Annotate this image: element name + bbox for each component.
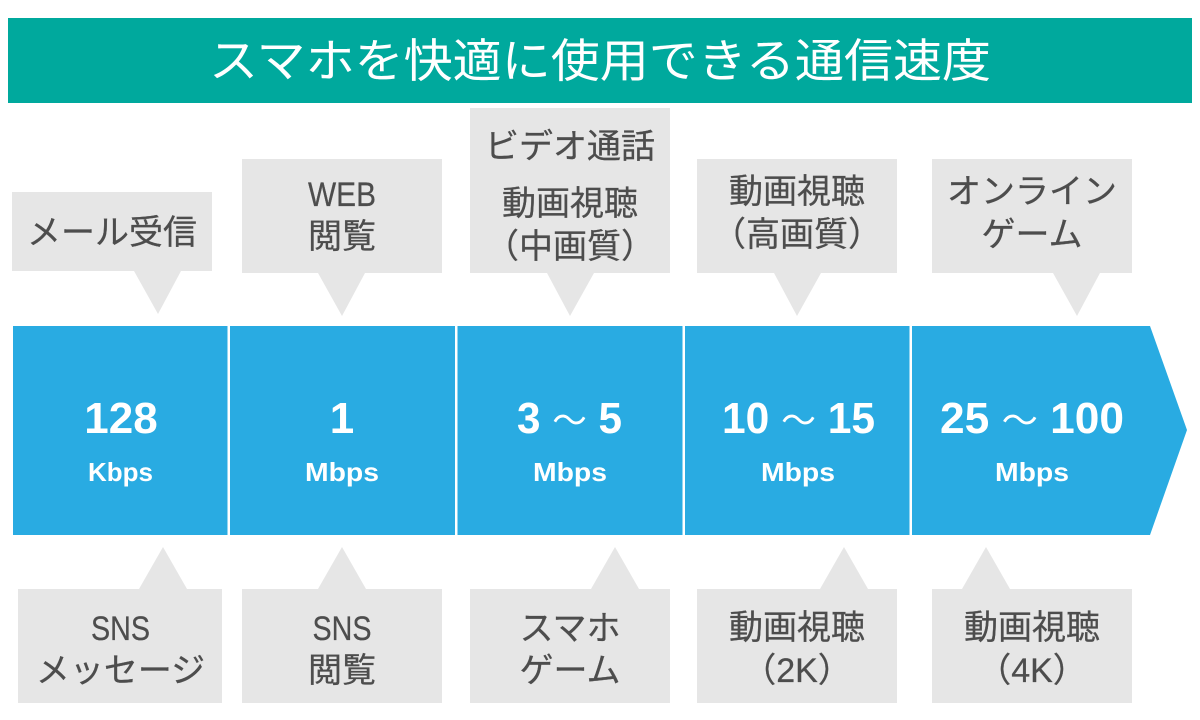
callout: 2K video — [697, 547, 897, 703]
callout: 4K video: 動画視聴 — [964, 609, 1100, 647]
callout: SNS browsing: 閲覧 — [308, 652, 376, 690]
callout: smartphone games: スマホ — [520, 610, 620, 648]
callout: 2K video: （2K） — [742, 652, 852, 690]
speed: 1 Mbps: Mbps — [305, 457, 379, 487]
callout: video call: （中画質） — [485, 228, 655, 266]
speed: 128 Kbps: 128 — [84, 394, 158, 443]
callout: SNS messages: メッセージ — [36, 652, 205, 690]
callout: SNS browsing — [242, 547, 442, 703]
speed: 25-100 Mbps — [940, 394, 1124, 487]
speed: 25-100 Mbps: 25 ～ 100 — [940, 394, 1124, 443]
callout: online games: ゲーム — [982, 216, 1082, 254]
callout: SNS browsing: SNS — [312, 610, 372, 648]
speed arrow — [13, 326, 1187, 535]
callout: high quality video — [697, 159, 897, 316]
speed: 128 Kbps — [84, 394, 158, 487]
speed: 10-15 Mbps: 10 ～ 15 — [722, 394, 875, 443]
callout: smartphone games — [470, 547, 670, 703]
callout: SNS messages: SNS — [91, 610, 150, 648]
callout: high quality video: （高画質） — [712, 216, 882, 254]
callout: video call: 動画視聴 — [502, 185, 638, 223]
callout: SNS messages — [18, 547, 222, 703]
speed: 128 Kbps: Kbps — [88, 457, 153, 487]
callout: 2K video: 動画視聴 — [729, 609, 865, 647]
callout: video call — [470, 108, 670, 316]
speed: 3-5 Mbps: 3 ～ 5 — [517, 394, 622, 443]
speed: 10-15 Mbps — [722, 394, 875, 487]
callout: web browsing: WEB — [308, 176, 376, 214]
callout: 4K video — [932, 547, 1132, 703]
callout: video call: ビデオ通話 — [485, 128, 655, 166]
speed: 10-15 Mbps: Mbps — [761, 457, 835, 487]
speed: 25-100 Mbps: Mbps — [995, 457, 1069, 487]
speed: 1 Mbps — [305, 394, 379, 487]
callout: online games — [932, 159, 1132, 316]
callout: mail: メール受信 — [27, 214, 197, 252]
callout: 4K video: （4K） — [977, 652, 1087, 690]
callout: mail — [12, 192, 212, 314]
speed: 3-5 Mbps: Mbps — [533, 457, 607, 487]
callout: high quality video: 動画視聴 — [729, 173, 865, 211]
speed: 3-5 Mbps — [517, 394, 622, 487]
callout: smartphone games: ゲーム — [520, 652, 620, 690]
title banner — [8, 18, 1192, 103]
callout: online games: オンライン — [947, 173, 1117, 211]
callout: web browsing: 閲覧 — [308, 218, 376, 256]
title banner: スマホを快適に使用できる通信速度 — [209, 35, 991, 87]
speed: 1 Mbps: 1 — [330, 394, 354, 443]
callout: web browsing — [242, 159, 442, 316]
